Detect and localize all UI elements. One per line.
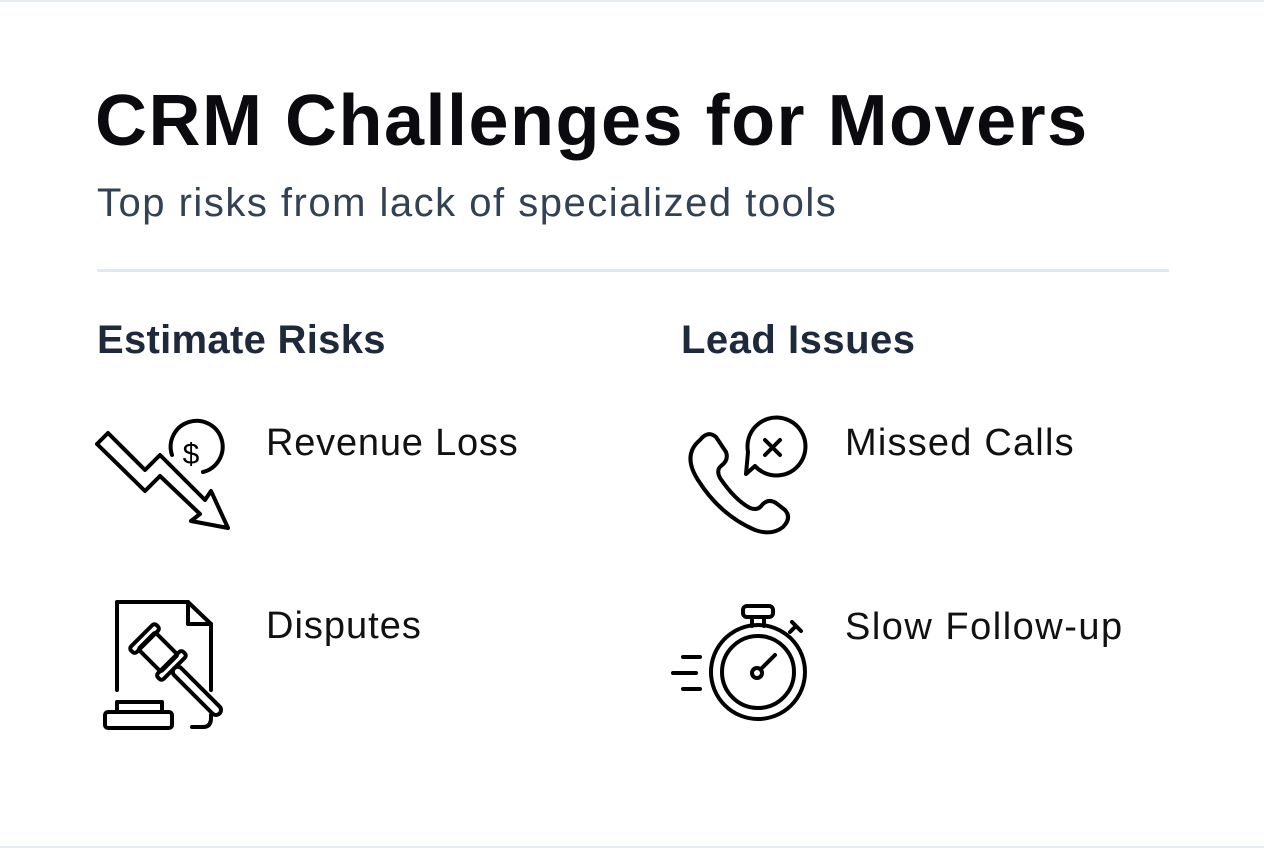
title: CRM Challenges for Movers: [95, 81, 1089, 161]
heading: Lead Issues: Lead Issues: [681, 318, 916, 362]
icon: phone with x: [688, 416, 808, 534]
heading: Estimate Risks: Estimate Risks: [97, 318, 386, 362]
item: Revenue Loss: [95, 418, 519, 530]
subtitle: Top risks from lack of specialized tools: [97, 181, 837, 225]
icon: gavel document: [103, 600, 223, 730]
label: Missed Calls: [845, 422, 1075, 464]
item: Missed Calls: [688, 416, 1075, 534]
label: Revenue Loss: [266, 422, 519, 464]
icon: trending down with dollar: [95, 418, 230, 530]
item: Slow Follow-up: [671, 604, 1124, 721]
label: Disputes: [266, 605, 422, 647]
icon: trending down with dollar: $: [183, 438, 200, 471]
icon: stopwatch: [671, 604, 807, 721]
label: Slow Follow-up: [845, 606, 1124, 648]
item: Disputes: [103, 600, 422, 730]
